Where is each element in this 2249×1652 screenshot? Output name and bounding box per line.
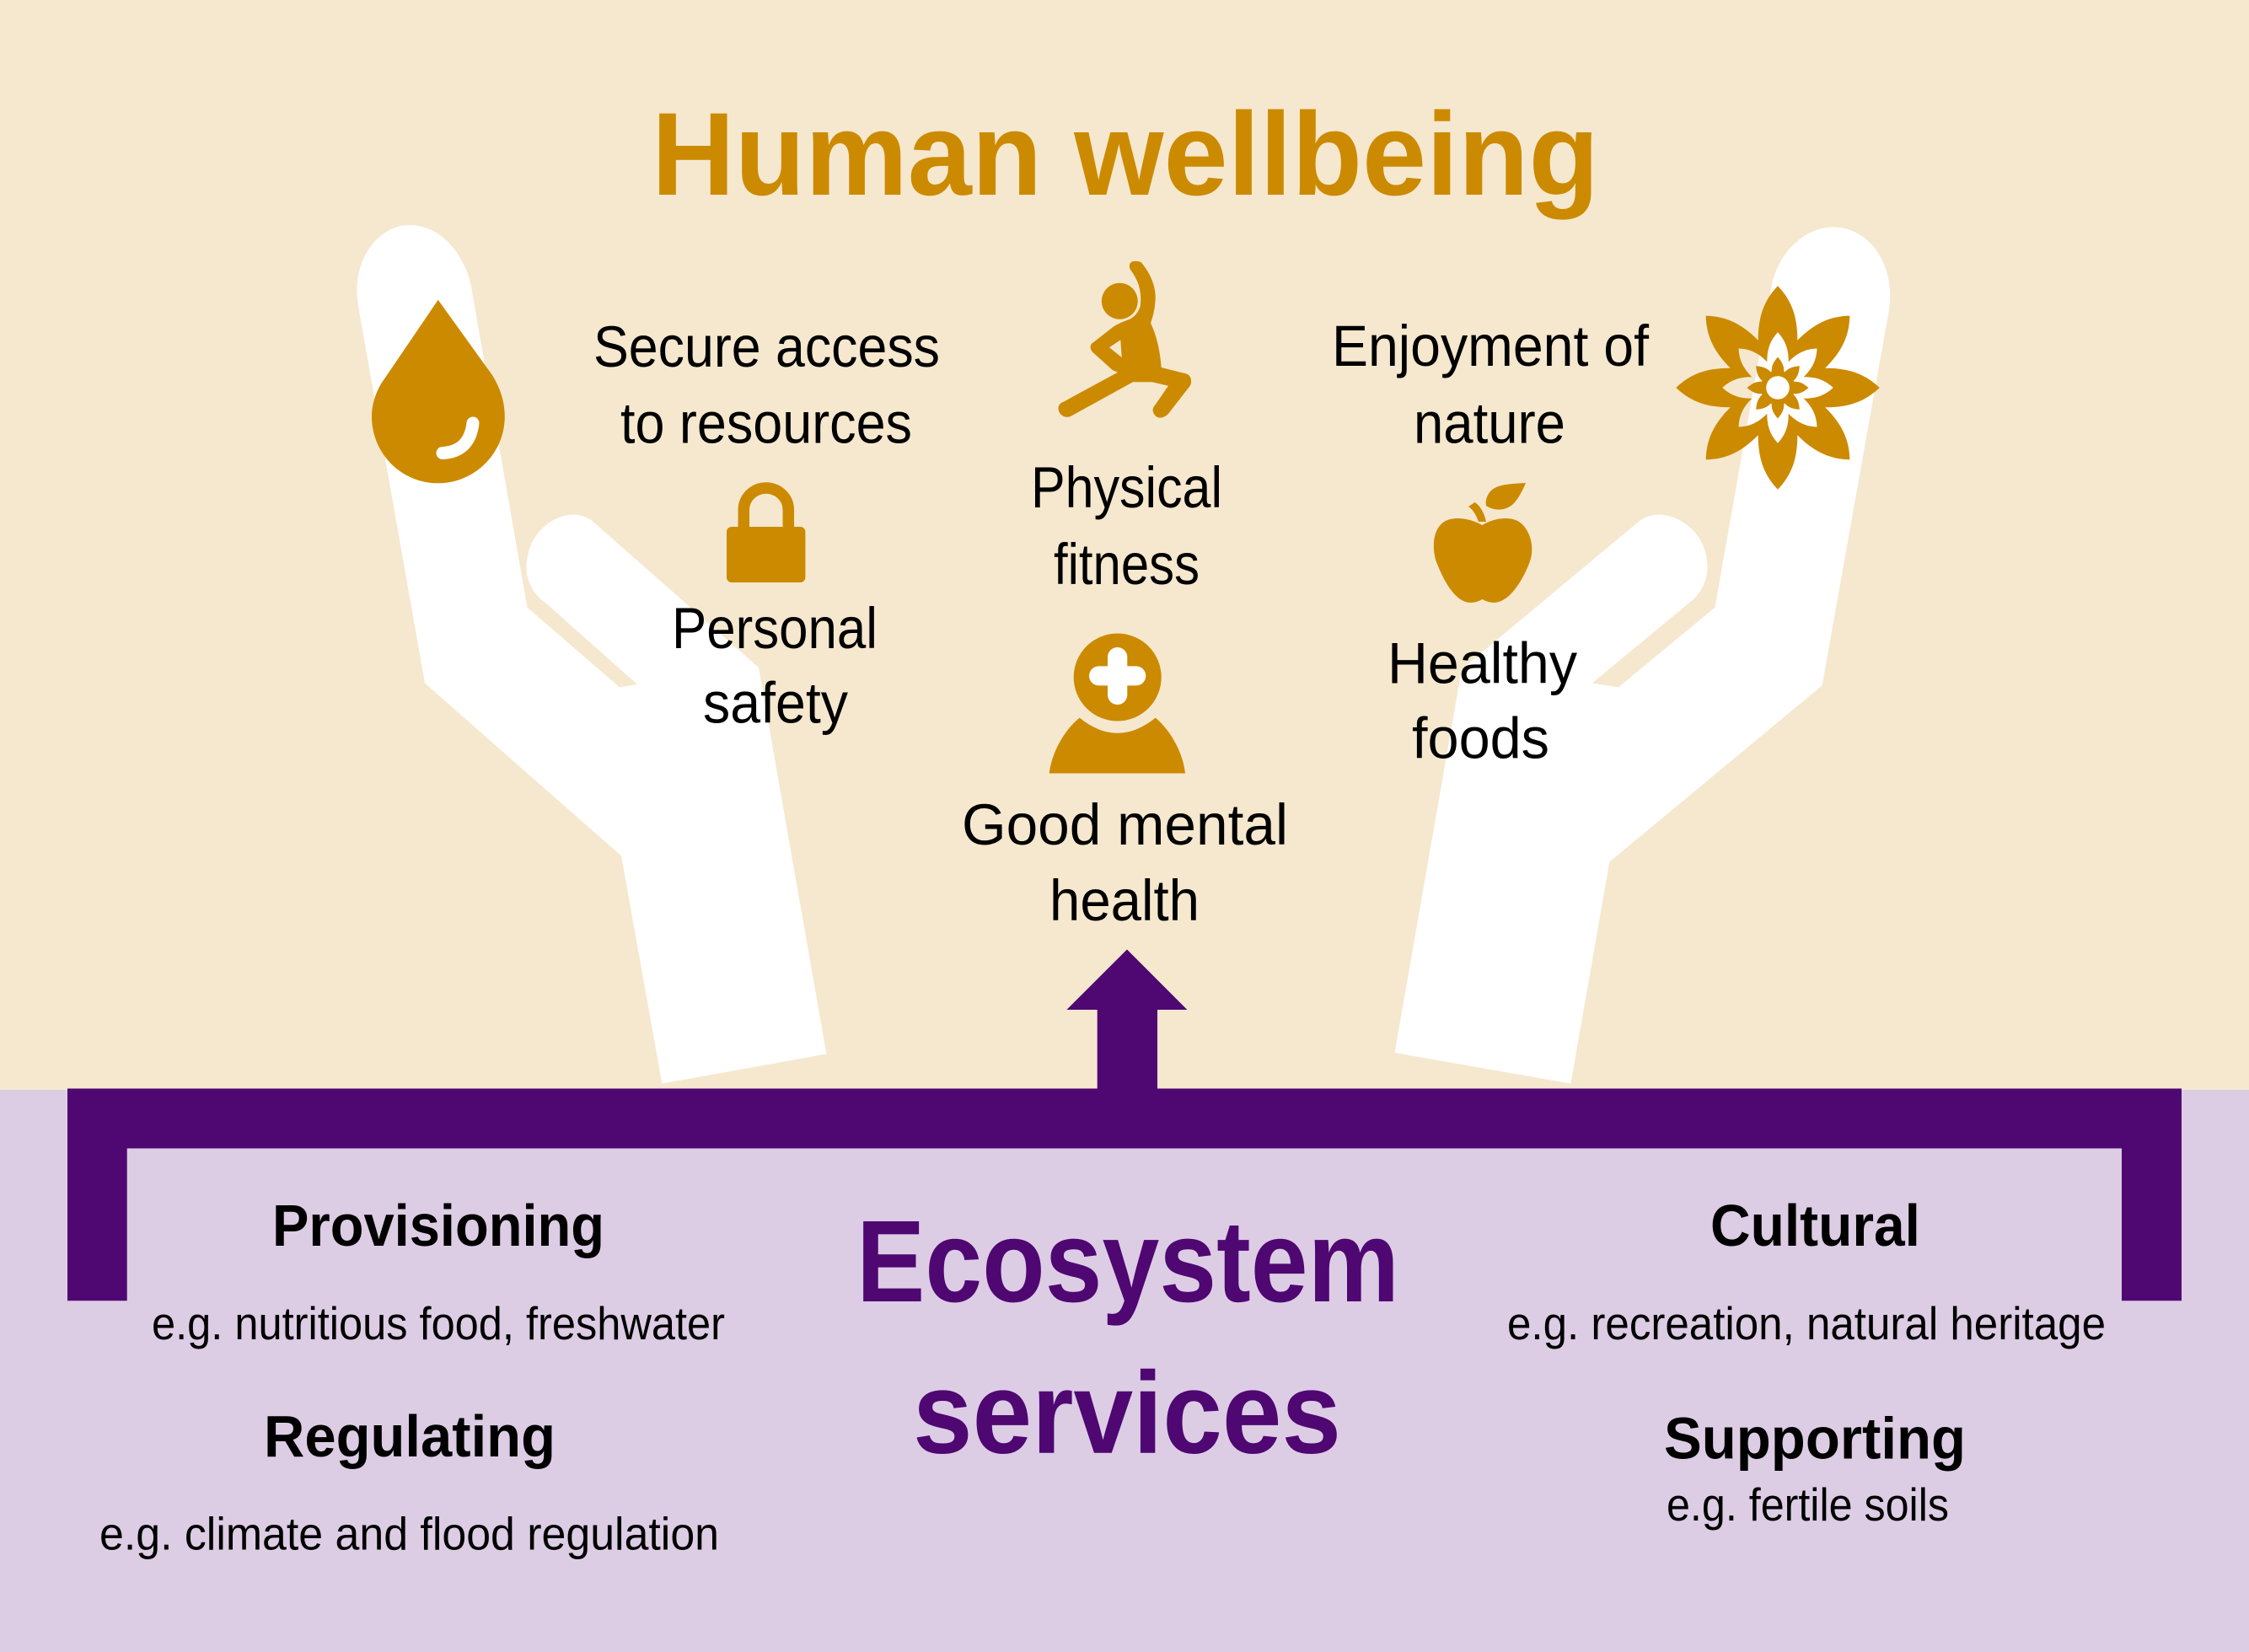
block: Regulating (99, 1403, 719, 1560)
icon: water drop (372, 300, 505, 483)
panel: human wellbeing background (0, 0, 2249, 1091)
heading: Ecosystem services: Ecosystem (856, 1197, 1399, 1327)
heading: Ecosystem services (856, 1197, 1399, 1478)
heading: Ecosystem services: services (913, 1349, 1341, 1478)
panel: ecosystem services background (0, 1090, 2249, 1652)
text: Healthy foods: Healthy (1388, 630, 1577, 696)
block: Cultural: Cultural (1710, 1193, 1920, 1258)
title: Human wellbeing: Human wellbeing (652, 88, 1599, 220)
block: Cultural (1507, 1193, 2106, 1349)
text: Enjoyment of nature: nature (1414, 391, 1565, 456)
block: Regulating: e.g. climate and flood regulation (99, 1508, 719, 1560)
text: Good mental health: health (1049, 868, 1200, 933)
block: Provisioning (152, 1193, 725, 1349)
text: Good mental health (962, 792, 1288, 933)
left hand (357, 225, 826, 1084)
text: Enjoyment of nature (1332, 314, 1650, 456)
icon: padlock (727, 488, 805, 582)
text: Personal safety: safety (703, 671, 848, 735)
right hand (1394, 228, 1890, 1084)
text: Healthy foods (1388, 630, 1577, 771)
text: Physical fitness: fitness (1054, 532, 1200, 597)
block: Regulating: Regulating (264, 1403, 556, 1469)
text: Physical fitness: Physical (1031, 455, 1222, 520)
text: Secure access to resources: to resources (620, 391, 912, 456)
text: Secure access to resources (593, 314, 940, 456)
block: Provisioning: Provisioning (272, 1193, 604, 1258)
block: Supporting: e.g. fertile soils (1667, 1478, 1949, 1531)
icon: person with cross (1049, 634, 1185, 774)
icon: stretching figure (1059, 261, 1191, 418)
block: Supporting (1664, 1405, 1966, 1531)
text: Personal safety: Personal (672, 596, 878, 661)
text: Good mental health: Good mental (962, 792, 1288, 857)
text: Personal safety (672, 596, 878, 735)
icon: flower (1676, 286, 1880, 490)
text: Physical fitness (1031, 455, 1222, 597)
text: Healthy foods: foods (1412, 706, 1549, 771)
icon: apple (1434, 483, 1532, 603)
text: Enjoyment of nature: Enjoyment of (1332, 314, 1650, 378)
text: Secure access to resources: Secure access (593, 314, 940, 379)
bracket and upward arrow (67, 949, 2182, 1301)
block: Supporting: Supporting (1664, 1405, 1966, 1471)
block: Provisioning: e.g. nutritious food, freshwater (152, 1297, 725, 1349)
block: Cultural: e.g. recreation, natural heritage (1507, 1297, 2106, 1349)
